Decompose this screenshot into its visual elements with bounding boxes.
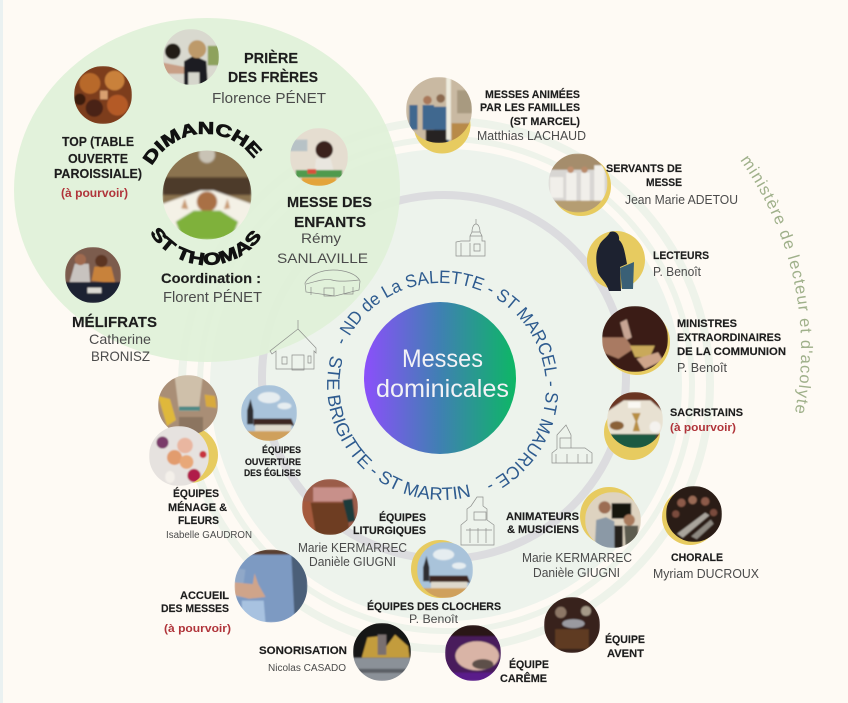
- item: Sacristains: [604, 392, 743, 460]
- photo: prayer: [163, 29, 219, 85]
- heading: LECTEURS: [653, 250, 709, 262]
- item: Messe des enfants: SANLAVILLE: [277, 250, 368, 266]
- icon: barn chapel: [305, 270, 360, 296]
- photo: flowers: [149, 426, 209, 486]
- icon: church right: [552, 425, 592, 463]
- heading: ÉQUIPE: [605, 633, 645, 646]
- photo: advent: [544, 597, 600, 653]
- name: Jean Marie ADETOU: [625, 193, 738, 207]
- heading: MINISTRES: [677, 318, 737, 330]
- photo: readers: [65, 247, 121, 303]
- outer ring bands: [182, 121, 710, 649]
- photo: reader figure: [596, 231, 634, 291]
- item: Équipes ouverture des églises: OUVERTURE: [245, 457, 301, 468]
- yellow accent: [604, 309, 670, 375]
- item: Équipes ouverture des églises: DES ÉGLISES: [244, 468, 301, 479]
- icon: church top: [456, 219, 485, 256]
- item: Animateurs et musiciens: & MUSICIENS: [507, 524, 579, 536]
- photo: church: [241, 385, 297, 441]
- item: Accueil des messes: DES MESSES: [161, 603, 229, 615]
- heading: ÉQUIPES: [173, 487, 219, 500]
- photo: lectern: [302, 479, 358, 535]
- coordination block: Coordination :: [161, 270, 261, 286]
- photo: altar table: [607, 392, 663, 448]
- name: Matthias LACHAUD: [477, 129, 586, 143]
- status: (à pourvoir): [164, 623, 231, 635]
- circular text: church names lower arc: STE BRIGITTE - ST MARTIN: [327, 356, 470, 500]
- item: Prière des frères: [163, 29, 326, 107]
- item: Équipes ménage et fleurs: [149, 375, 252, 541]
- item: Prière des frères: DES FRÈRES: [228, 69, 318, 86]
- yellow accent: [580, 487, 638, 545]
- title arc: DIMANCHE: DIMANCHE: [142, 122, 262, 166]
- photo: choir: [666, 486, 722, 542]
- item: Messe des enfants: [277, 128, 372, 266]
- photo: church landscape: [417, 542, 473, 598]
- name: Isabelle GAUDRON: [166, 530, 252, 541]
- item: Mélifrats: [65, 247, 157, 364]
- item: TOP table ouverte: PAROISSIALE): [54, 167, 142, 181]
- panel: Dimanche St Thomas green circle: [14, 18, 400, 362]
- name: P. Benoît: [653, 265, 702, 279]
- item: Équipes liturgiques: Danièle GIUGNI: [309, 555, 396, 569]
- item: Servants de messe: MESSE: [646, 177, 682, 189]
- yellow accent: [411, 540, 469, 598]
- name: Myriam DUCROUX: [653, 567, 760, 581]
- item: Ministres extraordinaires: EXTRAORDINAIRES: [677, 332, 781, 344]
- item: Équipe Carême: [445, 625, 549, 685]
- item: Équipes ouverture des églises: [241, 385, 301, 479]
- yellow accent: [551, 156, 611, 216]
- heading: SERVANTS DE: [606, 163, 682, 175]
- item: Équipe Carême: CARÊME: [500, 672, 547, 685]
- item: TOP table ouverte: OUVERTE: [68, 152, 128, 166]
- item: Équipes ménage et fleurs: MÉNAGE &: [168, 501, 227, 514]
- pale central disc: [210, 149, 682, 621]
- item: Chorale: [653, 486, 760, 581]
- yellow accent: [662, 489, 718, 545]
- item: Équipe Avent: AVENT: [607, 648, 644, 660]
- coordination block: [161, 270, 262, 306]
- icon: church bottom: [461, 497, 494, 545]
- item: Lecteurs: [587, 231, 709, 291]
- item: Ministres extraordinaires: DE LA COMMUNION: [677, 346, 786, 358]
- heading: SACRISTAINS: [670, 407, 743, 419]
- heading: MESSES ANIMÉES: [485, 88, 580, 101]
- photo: families: [406, 77, 472, 143]
- heading: ACCUEIL: [180, 590, 229, 602]
- heading: TOP (TABLE: [62, 135, 134, 149]
- heading: ÉQUIPE: [509, 658, 549, 671]
- item: Équipes liturgiques: LITURGIQUES: [353, 525, 426, 537]
- item: Équipes des clochers: [367, 540, 501, 626]
- photo: ashes: [445, 625, 501, 681]
- yellow accent: [162, 427, 218, 483]
- photo: sound desk: [353, 623, 411, 681]
- item: Messe des enfants: ENFANTS: [294, 214, 366, 231]
- heading: ÉQUIPES: [379, 511, 426, 524]
- central disc: Messes dominicales: [364, 302, 516, 454]
- central disc: Messes dominicales: Messes: [402, 345, 483, 373]
- heading: ÉQUIPES: [262, 445, 301, 456]
- item: Animateurs et musiciens: Danièle GIUGNI: [533, 566, 620, 580]
- central disc: Messes dominicales: dominicales: [376, 375, 509, 403]
- heading: SONORISATION: [259, 645, 347, 657]
- name: Florence PÉNET: [212, 90, 326, 107]
- photo: St Thomas mass: [162, 147, 252, 240]
- circular text: church names upper arc: - ND de La SALETTE - ST MARCEL - ST MAURICE -: [340, 270, 558, 488]
- item: Messes animées par les familles: [406, 77, 586, 154]
- item: TOP table ouverte: [54, 66, 142, 200]
- photo: communion: [602, 306, 668, 372]
- yellow accent: [604, 404, 660, 460]
- item: Mélifrats: BRONISZ: [91, 348, 150, 364]
- name: Catherine: [89, 331, 151, 347]
- item: Servants de messe: [548, 154, 738, 216]
- names: Marie KERMARREC: [298, 541, 407, 555]
- item: Équipe Avent: [544, 597, 645, 660]
- heading: CHORALE: [671, 552, 723, 564]
- heading: MESSE DES: [287, 194, 372, 211]
- status: (à pourvoir): [61, 188, 128, 200]
- title arc: ST THOMAS: ST THOMAS: [151, 228, 260, 266]
- item: Messes animées par les familles: PAR LES FAMILLES: [480, 102, 580, 114]
- coordination block: Florent PÉNET: [163, 289, 262, 306]
- yellow disc: [587, 231, 645, 289]
- photo: child: [290, 128, 348, 186]
- photo: cleaning: [158, 375, 218, 435]
- photo: musicians: [585, 492, 641, 548]
- item: Messes animées par les familles: (ST MARCEL): [510, 116, 580, 128]
- curved label: ministère de lecteur et d'acolyte: ministère de lecteur et d'acolyte: [740, 156, 814, 413]
- item: Équipes ménage et fleurs: FLEURS: [178, 515, 219, 527]
- icon: chapel left: [270, 320, 316, 370]
- name: Rémy: [301, 230, 341, 246]
- heading: MÉLIFRATS: [72, 314, 157, 331]
- name: P. Benoît: [677, 361, 728, 375]
- item: Sonorisation: [259, 623, 411, 681]
- name: Nicolas CASADO: [268, 663, 346, 674]
- item: Animateurs et musiciens: [506, 487, 641, 580]
- grey ring: [262, 195, 626, 559]
- names: Marie KERMARREC: [522, 551, 632, 565]
- photo: altar servers: [548, 154, 608, 212]
- item: Équipes liturgiques: [298, 479, 426, 569]
- photo: food table: [74, 66, 132, 124]
- item: Accueil des messes: [161, 550, 308, 635]
- photo: welcome: [234, 550, 308, 622]
- status: (à pourvoir): [670, 422, 736, 434]
- item: Ministres extraordinaires: [602, 306, 786, 375]
- heading: ÉQUIPES DES CLOCHERS: [367, 600, 501, 613]
- name: P. Benoît: [409, 612, 459, 626]
- heading: ANIMATEURS: [506, 511, 579, 523]
- yellow accent: [414, 96, 470, 154]
- heading: PRIÈRE: [244, 50, 298, 67]
